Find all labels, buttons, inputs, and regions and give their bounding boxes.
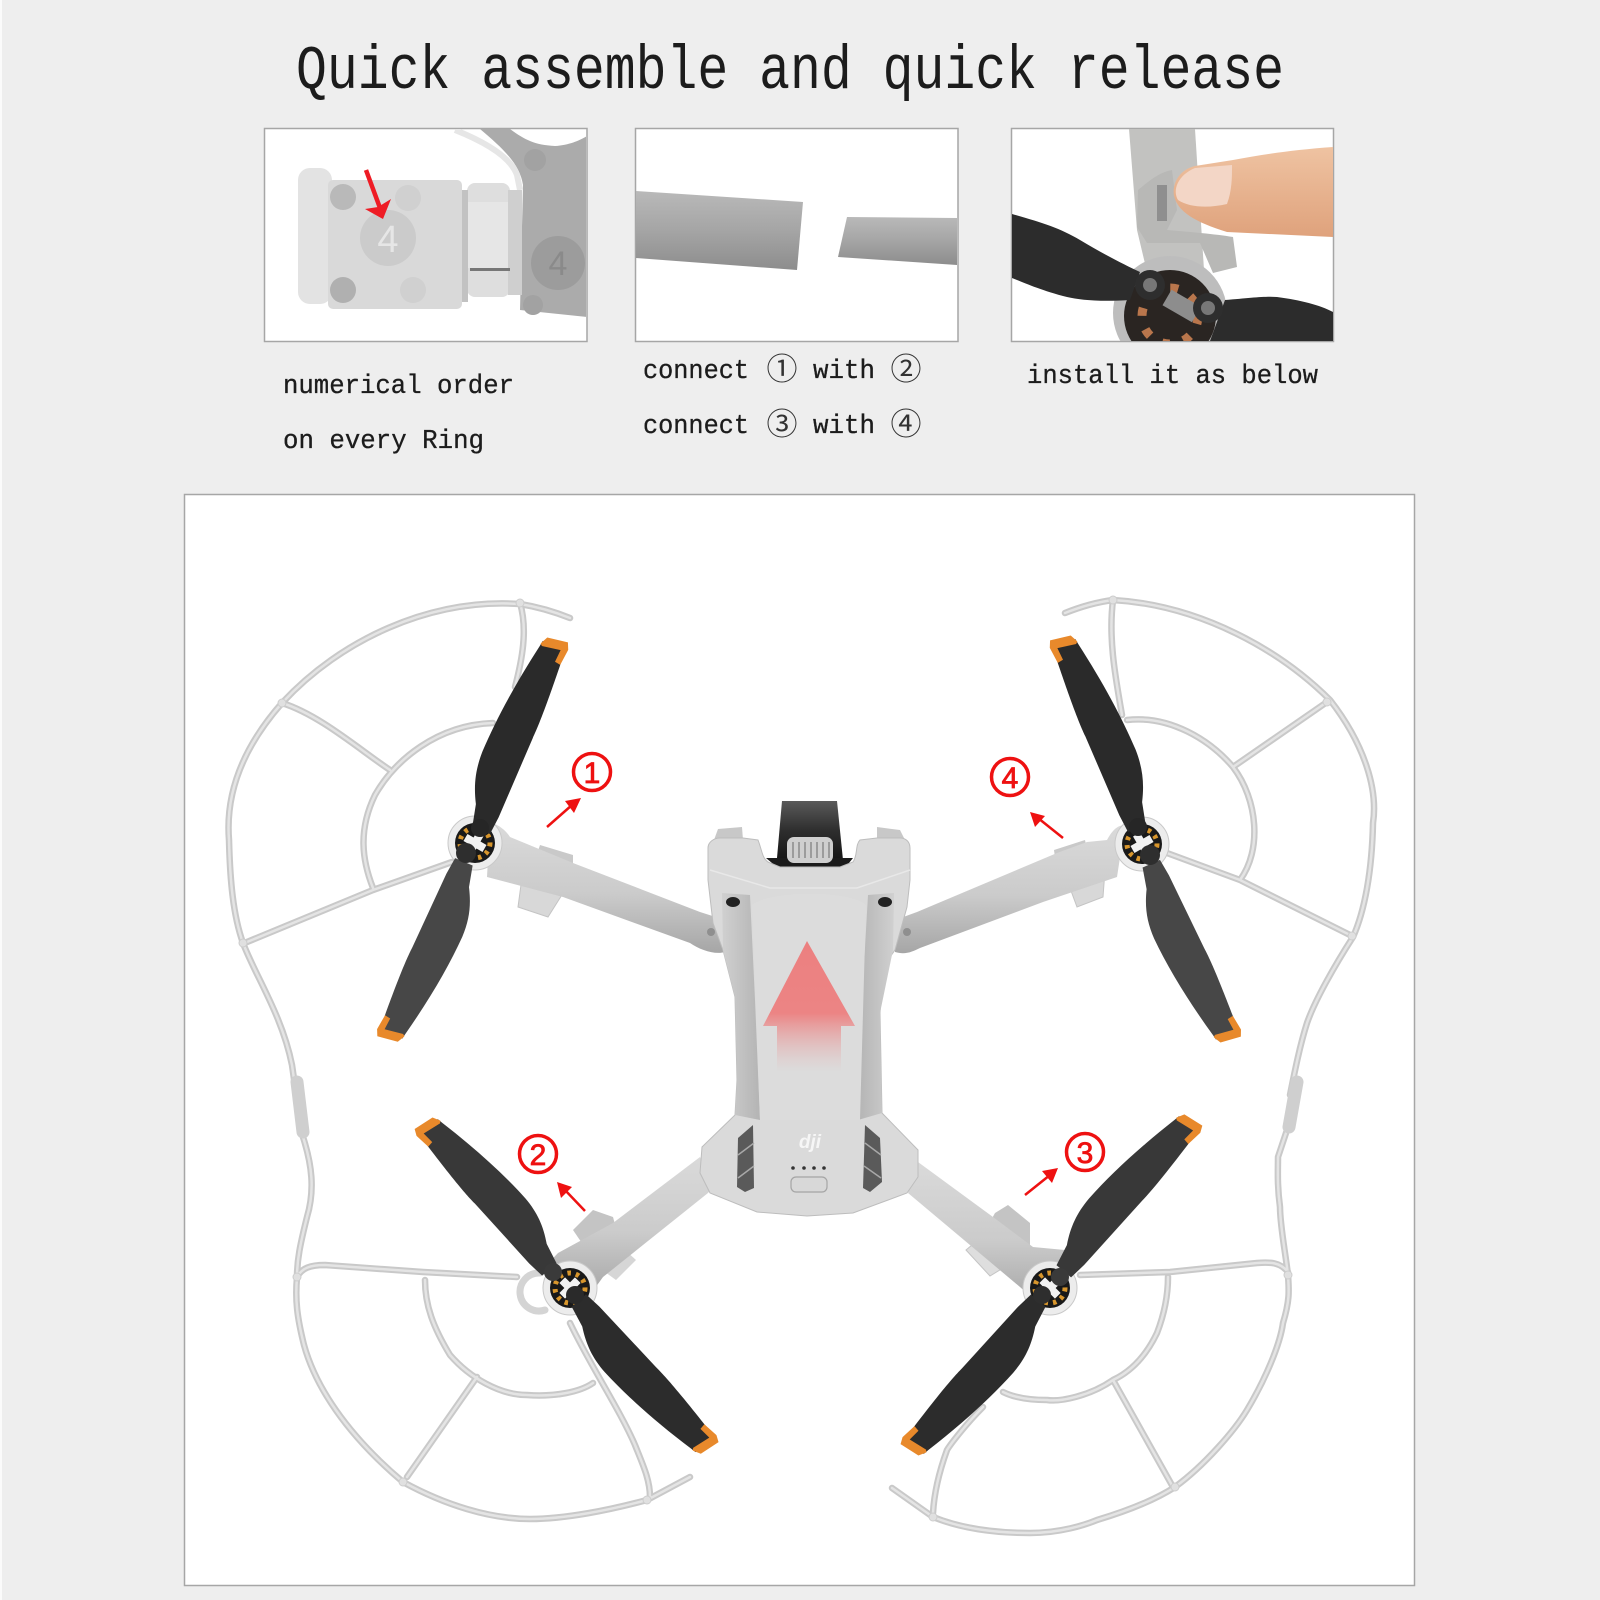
drone body	[700, 801, 918, 1216]
clip body with numeral: 4	[377, 219, 399, 261]
caption: numerical order	[283, 372, 514, 457]
motor 2	[543, 1261, 597, 1315]
caption: connect pairs: ③	[766, 399, 798, 444]
panel: tube connection photo	[636, 128, 958, 342]
propeller guard rings	[228, 596, 1374, 1533]
panel: installation photo	[1010, 128, 1334, 342]
arm 1	[487, 822, 725, 953]
caption: connect pairs	[643, 344, 922, 444]
motors	[448, 816, 1169, 1315]
caption: connect pairs: with	[813, 357, 875, 387]
guard clip	[1137, 170, 1237, 273]
camera gimbal	[766, 801, 853, 868]
panel: drone diagram	[184, 494, 1414, 1586]
guard: front right ring	[1065, 600, 1374, 1095]
label 1 with arrow: 1	[584, 757, 600, 790]
panel: numbered ring clip photo	[264, 128, 587, 342]
propeller 4	[1047, 626, 1244, 1053]
motor 4	[1115, 817, 1169, 871]
caption: connect pairs: ②	[890, 344, 922, 389]
direction arrow	[763, 941, 855, 1072]
guard: front left ring	[228, 603, 570, 1100]
ring junction knobs	[239, 596, 1356, 1521]
propeller 2	[412, 1103, 721, 1468]
caption: numerical order: numerical order	[283, 372, 514, 402]
ring connector tabs	[297, 1082, 1297, 1132]
left vent	[737, 1125, 754, 1192]
body shell	[700, 838, 918, 1216]
guard: rear right ring	[892, 1127, 1289, 1533]
caption: connect pairs: connect	[643, 412, 749, 442]
right ring body: 4	[549, 245, 567, 283]
label 3 with arrow: 3	[1077, 1137, 1093, 1170]
label 1 with arrow	[547, 754, 610, 827]
red arrow on clip	[365, 170, 391, 219]
power button	[791, 1177, 827, 1192]
guard: rear left ring	[296, 1137, 690, 1519]
central panel	[752, 894, 866, 1120]
right vent	[863, 1125, 882, 1192]
clip body with numeral	[298, 168, 462, 309]
propeller 1	[375, 628, 571, 1052]
caption: connect pairs: with	[813, 412, 875, 442]
label 2 with arrow	[520, 1136, 585, 1211]
rear left ring mount	[520, 1273, 545, 1311]
right side shading	[858, 893, 894, 1120]
propeller 3	[898, 1100, 1205, 1470]
caption: connect pairs: ④	[890, 399, 922, 444]
top band line	[710, 870, 910, 888]
label 4 with arrow: 4	[1002, 762, 1018, 795]
arm 4	[895, 825, 1125, 953]
shoulder tabs	[714, 827, 905, 840]
finger	[1174, 147, 1333, 237]
caption: numerical order: on every Ring	[283, 427, 484, 457]
caption: connect pairs: ①	[766, 344, 798, 389]
arm 2	[540, 1157, 715, 1295]
motor housing	[1113, 262, 1226, 341]
hinge	[462, 183, 522, 302]
caption: install it as below: install it as below	[1027, 362, 1318, 392]
title: Quick assemble and quick release	[296, 36, 1284, 107]
drone arms	[487, 822, 1125, 1305]
label 4 with arrow	[992, 758, 1063, 838]
left side shading	[722, 893, 760, 1120]
battery indicator dots	[791, 1166, 826, 1170]
body screws	[707, 897, 911, 936]
motor 1	[448, 816, 502, 870]
dji logo: dji	[799, 1132, 822, 1153]
left tube	[636, 191, 803, 270]
propeller blades	[1012, 214, 1333, 341]
arm 3	[908, 1162, 1065, 1305]
right ring body	[455, 129, 587, 317]
caption: connect pairs: connect	[643, 357, 749, 387]
label 2 with arrow: 2	[530, 1139, 546, 1172]
label 3 with arrow	[1025, 1134, 1104, 1195]
right tube	[838, 217, 957, 265]
motor 3	[1023, 1261, 1077, 1315]
drone arm column	[1129, 129, 1204, 272]
